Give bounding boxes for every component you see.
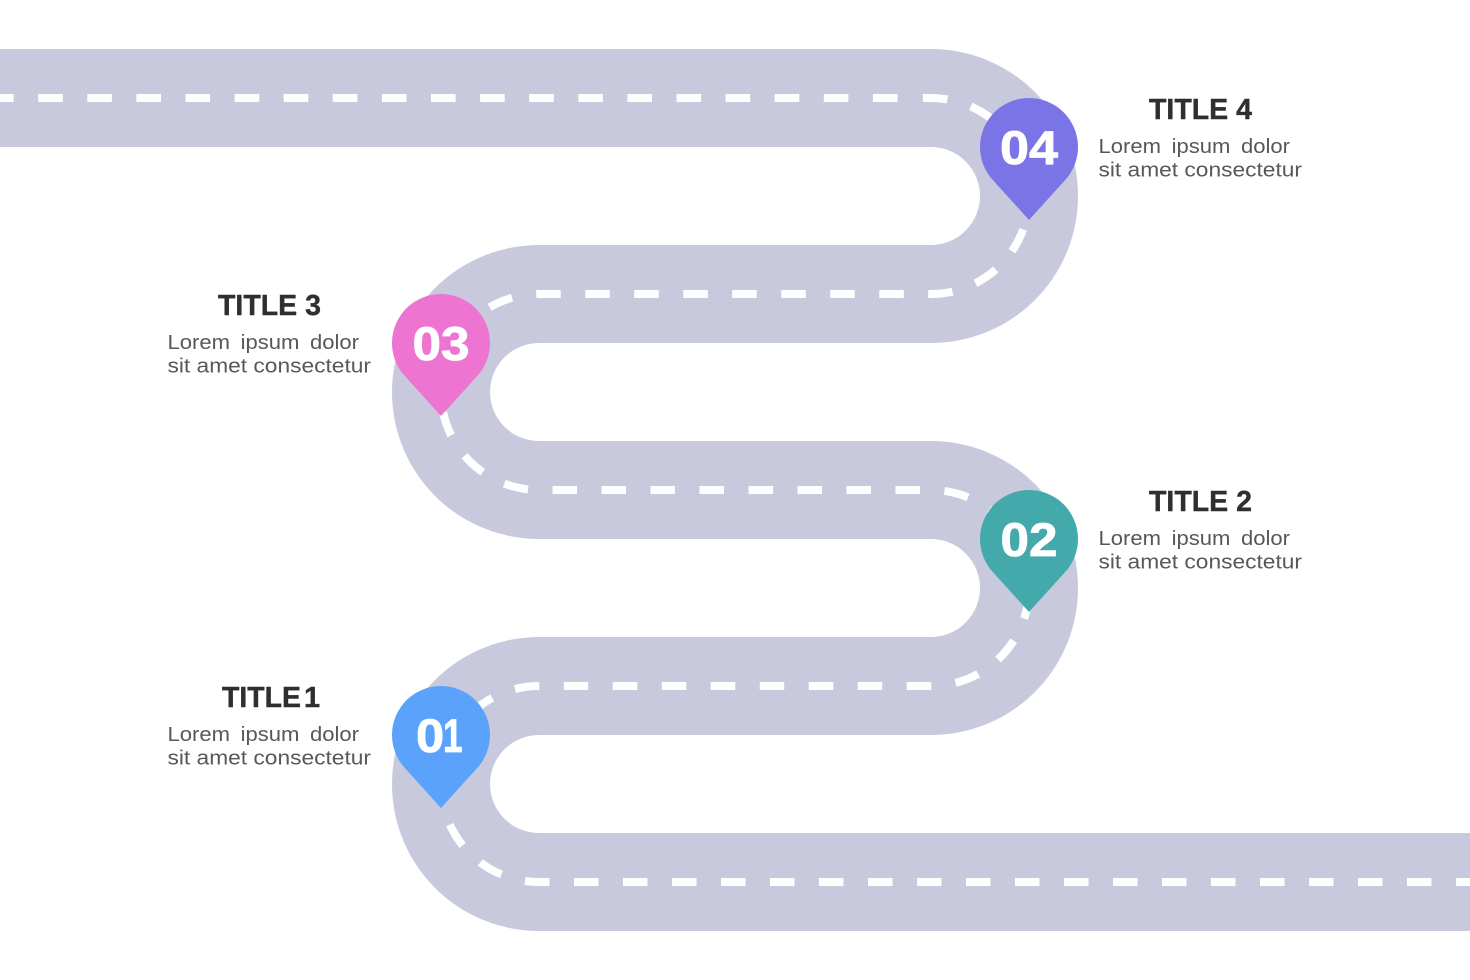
text block: title 4: TITLE 4 xyxy=(1149,94,1252,126)
pin 04 xyxy=(980,98,1078,220)
pin 02: 02 xyxy=(1000,513,1058,566)
pin 01: 0 xyxy=(416,711,444,763)
text block: title 1: sit amet consectetur xyxy=(168,748,371,770)
text block: title 3: Lorem ipsum dolor xyxy=(168,332,359,354)
pin 01: 1 xyxy=(443,709,463,762)
pin 04: 04 xyxy=(1000,121,1058,174)
text block: title 4: sit amet consectetur xyxy=(1098,160,1302,182)
text block: title 4: Lorem ipsum dolor xyxy=(1098,136,1290,158)
text block: title 1 xyxy=(168,682,371,770)
text block: title 1: Lorem ipsum dolor xyxy=(168,724,359,746)
text block: title 2: Lorem ipsum dolor xyxy=(1098,528,1290,550)
text block: title 4 xyxy=(1098,94,1302,182)
text block: title 2: sit amet consectetur xyxy=(1098,552,1302,574)
text block: title 1: 1 xyxy=(304,682,320,714)
winding road xyxy=(0,98,1470,882)
text block: title 2: TITLE 2 xyxy=(1149,486,1252,518)
text block: title 3 xyxy=(168,290,371,378)
pin 03: 03 xyxy=(412,317,470,370)
road centre dashes xyxy=(0,98,1470,882)
text block: title 3: TITLE 3 xyxy=(218,290,321,322)
pin 03 xyxy=(392,294,490,416)
pin 02 xyxy=(980,490,1078,612)
text block: title 3: sit amet consectetur xyxy=(168,356,371,378)
text block: title 1: TITLE xyxy=(222,682,301,714)
pin 01 xyxy=(392,686,490,808)
text block: title 2 xyxy=(1098,486,1302,574)
